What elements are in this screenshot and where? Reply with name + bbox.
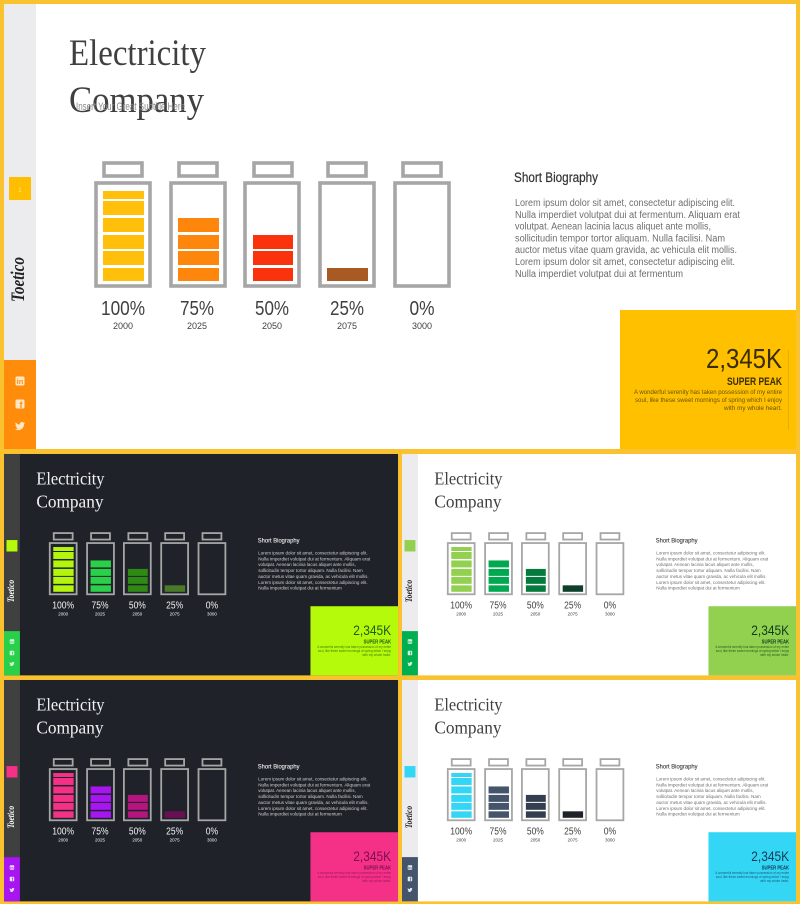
battery labels: 2075 xyxy=(170,612,180,617)
callout: super peak: soul, like these sweet mornings of spring which I enjoy xyxy=(716,649,789,653)
short biography: sollicitudin tempor tortor aliquam. Nulla facilisi. Nam xyxy=(656,794,761,800)
short biography: Lorem ipsum dolor sit amet, consectetur adipiscing elit. xyxy=(258,806,368,812)
panel: dark lime slide xyxy=(4,454,398,675)
callout: super peak xyxy=(708,832,796,901)
callout: super peak xyxy=(310,606,398,675)
callout: super peak: soul, like these sweet mornings of spring which I enjoy xyxy=(635,397,783,404)
battery labels: 75% xyxy=(490,601,507,612)
sidebar xyxy=(4,4,36,360)
title xyxy=(434,468,503,512)
short biography: Lorem ipsum dolor sit amet, consectetur adipiscing elit. xyxy=(656,550,766,556)
title: Company xyxy=(69,80,204,121)
short biography: volutpat. Aenean lacinia lacus aliquet ante mollis, xyxy=(656,788,754,794)
battery labels: 2000 xyxy=(456,838,467,843)
battery labels: 0% xyxy=(410,298,435,320)
battery labels: 2000 xyxy=(58,612,69,617)
battery labels: 2075 xyxy=(337,321,357,331)
short biography: Lorem ipsum dolor sit amet, consectetur adipiscing elit. xyxy=(515,198,735,209)
short biography: Short Biography xyxy=(656,538,698,545)
callout: super peak: 2,345K xyxy=(706,343,782,374)
callout: super peak: SUPER PEAK xyxy=(762,640,789,646)
short biography: Nulla imperdiet volutpat dui at fermentum xyxy=(656,812,740,818)
battery labels: 2000 xyxy=(456,612,467,617)
short biography: sollicitudin tempor tortor aliquam. Nulla facilisi. Nam xyxy=(258,568,363,574)
battery labels: 2000 xyxy=(58,838,69,843)
callout: super peak: with my whole heart. xyxy=(760,879,789,883)
social icons: f xyxy=(12,877,14,882)
battery labels: 2025 xyxy=(95,838,105,843)
battery labels: 3000 xyxy=(605,612,615,617)
battery chart xyxy=(50,759,225,820)
callout: super peak: with my whole heart. xyxy=(723,405,782,412)
battery labels xyxy=(52,827,218,843)
short biography: sollicitudin tempor tortor aliquam. Nulla facilisi. Nam xyxy=(515,233,725,244)
callout: super peak: A wonderful serenity has taken possession of my entire xyxy=(715,871,789,875)
battery labels: 2075 xyxy=(568,612,578,617)
battery labels: 50% xyxy=(129,827,146,838)
callout: super peak: SUPER PEAK xyxy=(364,640,391,646)
social icons xyxy=(4,631,20,675)
short biography: Lorem ipsum dolor sit amet, consectetur adipiscing elit. xyxy=(258,550,368,556)
callout: super peak: soul, like these sweet mornings of spring which I enjoy xyxy=(318,875,391,879)
callout: super peak: 2,345K xyxy=(353,622,392,638)
battery labels: 100% xyxy=(101,298,145,320)
battery labels: 50% xyxy=(527,827,544,838)
callout: super peak: soul, like these sweet mornings of spring which I enjoy xyxy=(318,649,391,653)
title: Company xyxy=(36,718,104,738)
short biography: sollicitudin tempor tortor aliquam. Nulla facilisi. Nam xyxy=(258,794,363,800)
battery labels: 25% xyxy=(166,827,183,838)
callout: super peak: 2,345K xyxy=(353,848,392,864)
battery labels: 100% xyxy=(450,827,472,838)
social icons: in xyxy=(408,640,412,644)
short biography: Lorem ipsum dolor sit amet, consectetur adipiscing elit. xyxy=(515,257,735,268)
battery labels: 2050 xyxy=(530,612,541,617)
short biography: auctor metus vitae quam gravida, ac vehicula elit mollis. xyxy=(258,574,369,580)
battery labels: 75% xyxy=(180,298,214,320)
title: Company xyxy=(36,492,104,512)
battery labels: 25% xyxy=(166,601,183,612)
battery labels: 2025 xyxy=(493,838,503,843)
callout: super peak: 2,345K xyxy=(751,848,790,864)
short biography: Short Biography xyxy=(258,764,300,771)
title: Insert Your Great Subtitle Here xyxy=(76,101,185,113)
battery labels: 2025 xyxy=(493,612,503,617)
short biography: auctor metus vitae quam gravida, ac vehicula elit mollis. xyxy=(656,800,767,806)
battery labels: 50% xyxy=(255,298,289,320)
short biography xyxy=(656,764,769,818)
short biography xyxy=(258,764,371,818)
short biography: Lorem ipsum dolor sit amet, consectetur adipiscing elit. xyxy=(656,776,766,782)
short biography: Lorem ipsum dolor sit amet, consectetur adipiscing elit. xyxy=(656,580,766,586)
callout: super peak: with my whole heart. xyxy=(362,653,391,657)
sidebar: Toetico xyxy=(405,580,415,602)
sidebar xyxy=(402,454,418,631)
battery labels: 75% xyxy=(490,827,507,838)
battery labels: 2075 xyxy=(170,838,180,843)
social icons: in xyxy=(10,866,14,870)
battery labels: 25% xyxy=(564,601,581,612)
battery labels: 2050 xyxy=(262,321,282,331)
battery labels: 100% xyxy=(450,601,472,612)
battery labels: 3000 xyxy=(207,612,217,617)
battery labels xyxy=(52,601,218,617)
battery labels xyxy=(450,601,616,617)
battery labels xyxy=(101,298,435,331)
title: Company xyxy=(434,492,502,512)
title: Electricity xyxy=(36,694,105,714)
social icons: in xyxy=(10,640,14,644)
battery labels: 75% xyxy=(92,601,109,612)
sidebar xyxy=(4,680,20,857)
battery labels: 2050 xyxy=(132,838,143,843)
callout: super peak xyxy=(310,832,398,901)
short biography: volutpat. Aenean lacinia lacus aliquet ante mollis, xyxy=(656,562,754,568)
battery labels xyxy=(450,827,616,843)
short biography: Nulla imperdiet volutpat dui at fermentum. Aliquam erat xyxy=(258,782,371,788)
battery labels: 0% xyxy=(206,827,218,838)
short biography: volutpat. Aenean lacinia lacus aliquet ante mollis, xyxy=(258,788,356,794)
short biography: auctor metus vitae quam gravida, ac vehicula elit mollis. xyxy=(515,245,737,256)
battery chart xyxy=(50,533,225,594)
battery labels: 2050 xyxy=(530,838,541,843)
callout: super peak: SUPER PEAK xyxy=(364,866,391,872)
short biography: Short Biography xyxy=(514,170,598,185)
short biography: Lorem ipsum dolor sit amet, consectetur adipiscing elit. xyxy=(258,580,368,586)
title xyxy=(434,694,503,738)
social icons: f xyxy=(12,651,14,656)
short biography xyxy=(656,538,769,592)
title: Electricity xyxy=(36,468,105,488)
short biography: Nulla imperdiet volutpat dui at fermentum xyxy=(656,586,740,592)
short biography: Nulla imperdiet volutpat dui at fermentum. Aliquam erat xyxy=(656,556,769,562)
short biography: Nulla imperdiet volutpat dui at fermentum xyxy=(258,812,342,818)
panel: dark pink slide xyxy=(4,680,398,901)
callout: super peak: with my whole heart. xyxy=(760,653,789,657)
short biography: volutpat. Aenean lacinia lacus aliquet ante mollis, xyxy=(515,222,711,233)
battery labels: 25% xyxy=(330,298,364,320)
battery labels: 100% xyxy=(52,601,74,612)
title: Company xyxy=(434,718,502,738)
battery chart xyxy=(448,533,623,594)
sidebar: Toetico xyxy=(7,806,17,828)
sidebar xyxy=(4,454,20,631)
battery labels: 75% xyxy=(92,827,109,838)
battery labels: 100% xyxy=(52,827,74,838)
short biography xyxy=(514,170,740,280)
short biography: auctor metus vitae quam gravida, ac vehicula elit mollis. xyxy=(656,574,767,580)
battery labels: 2025 xyxy=(95,612,105,617)
title: Electricity xyxy=(434,694,503,714)
callout: super peak: with my whole heart. xyxy=(362,879,391,883)
battery labels: 50% xyxy=(527,601,544,612)
battery labels: 3000 xyxy=(207,838,217,843)
title xyxy=(36,468,105,512)
panel: large orange slide xyxy=(4,4,796,449)
callout: super peak: A wonderful serenity has taken possession of my entire xyxy=(715,645,789,649)
battery labels: 2050 xyxy=(132,612,143,617)
sidebar xyxy=(402,680,418,857)
battery labels: 2000 xyxy=(113,321,133,331)
short biography xyxy=(258,538,371,592)
short biography: Nulla imperdiet volutpat dui at fermentum xyxy=(515,269,683,280)
title xyxy=(69,33,206,121)
callout: super peak xyxy=(708,606,796,675)
social icons: in xyxy=(17,377,24,386)
callout: super peak: SUPER PEAK xyxy=(762,866,789,872)
callout: super peak xyxy=(620,310,796,449)
social icons xyxy=(4,360,36,449)
short biography: Nulla imperdiet volutpat dui at fermentum. Aliquam erat xyxy=(258,556,371,562)
title: Electricity xyxy=(434,468,503,488)
battery labels: 0% xyxy=(206,601,218,612)
short biography: Nulla imperdiet volutpat dui at fermentum. Aliquam erat xyxy=(515,210,740,221)
battery labels: 0% xyxy=(604,827,616,838)
sidebar: 1 xyxy=(18,188,22,194)
battery labels: 25% xyxy=(564,827,581,838)
battery chart xyxy=(96,163,449,286)
battery labels: 2075 xyxy=(568,838,578,843)
social icons xyxy=(402,631,418,675)
callout: super peak: A wonderful serenity has taken possession of my entire xyxy=(317,871,391,875)
callout: super peak: SUPER PEAK xyxy=(727,376,782,388)
social icons: f xyxy=(410,877,412,882)
battery labels: 3000 xyxy=(605,838,615,843)
short biography: Short Biography xyxy=(656,764,698,771)
sidebar: Toetico xyxy=(405,806,415,828)
battery labels: 0% xyxy=(604,601,616,612)
social icons: f xyxy=(410,651,412,656)
short biography: volutpat. Aenean lacinia lacus aliquet ante mollis, xyxy=(258,562,356,568)
title: Electricity xyxy=(69,33,206,74)
short biography: Nulla imperdiet volutpat dui at fermentum. Aliquam erat xyxy=(656,782,769,788)
battery chart xyxy=(448,759,623,820)
panel: white cyan slide xyxy=(402,680,796,901)
battery labels: 3000 xyxy=(412,321,432,331)
short biography: Short Biography xyxy=(258,538,300,545)
sidebar: Toetico xyxy=(7,580,17,602)
social icons xyxy=(4,857,20,901)
callout: super peak: 2,345K xyxy=(751,622,790,638)
sidebar: Toetico xyxy=(8,257,29,302)
short biography: Lorem ipsum dolor sit amet, consectetur adipiscing elit. xyxy=(258,776,368,782)
battery labels: 50% xyxy=(129,601,146,612)
short biography: sollicitudin tempor tortor aliquam. Nulla facilisi. Nam xyxy=(656,568,761,574)
callout: super peak: A wonderful serenity has taken possession of my entire xyxy=(634,389,782,396)
callout: super peak: soul, like these sweet mornings of spring which I enjoy xyxy=(716,875,789,879)
short biography: Lorem ipsum dolor sit amet, consectetur adipiscing elit. xyxy=(656,806,766,812)
short biography: auctor metus vitae quam gravida, ac vehicula elit mollis. xyxy=(258,800,369,806)
callout: super peak: A wonderful serenity has taken possession of my entire xyxy=(317,645,391,649)
short biography: Nulla imperdiet volutpat dui at fermentum xyxy=(258,586,342,592)
title xyxy=(36,694,105,738)
social icons: f xyxy=(20,400,24,410)
panel: white green slide xyxy=(402,454,796,675)
battery labels: 2025 xyxy=(187,321,207,331)
social icons xyxy=(402,857,418,901)
social icons: in xyxy=(408,866,412,870)
